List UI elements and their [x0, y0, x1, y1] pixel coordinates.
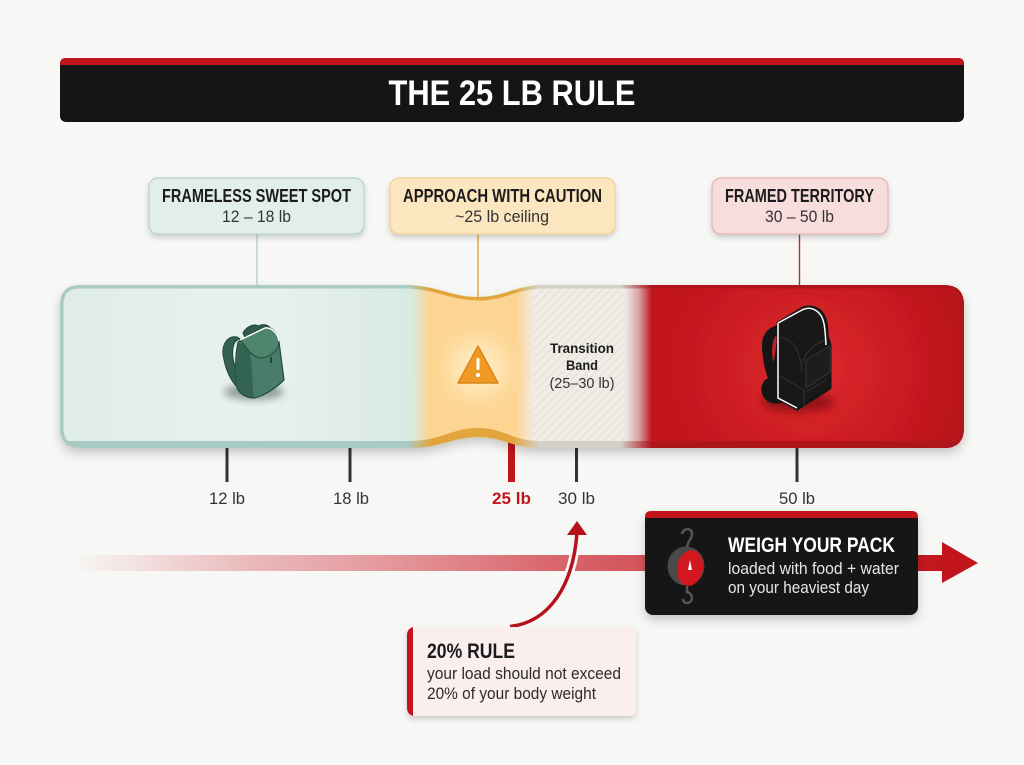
- red zone glow: [702, 288, 924, 441]
- tick: 18 lb: [348, 448, 352, 482]
- label: framed territory: FRAMED TERRITORY: [725, 186, 874, 206]
- card: weigh your pack: [645, 511, 918, 615]
- load progression arrow: [75, 542, 978, 583]
- title bar: THE 25 LB RULE: [388, 74, 636, 113]
- transition band hatch: [533, 285, 625, 448]
- label: approach with caution: ~25 lb ceiling: [455, 207, 549, 226]
- connector: caution: [477, 234, 479, 298]
- tick: 30 lb: [575, 448, 578, 482]
- tick: 50 lb: [796, 448, 798, 482]
- label: frameless sweet spot: 12 – 18 lb: [222, 207, 291, 226]
- icon: green frameless backpack: [223, 325, 284, 400]
- tick labels: 12 lb: [209, 489, 245, 508]
- title bar: [60, 58, 964, 122]
- connector: frameless: [256, 234, 258, 286]
- infographic: the 25 lb rule: [56, 58, 978, 722]
- transition band text: (25–30 lb): [550, 376, 614, 392]
- connector: framed: [798, 234, 800, 286]
- card: 20% rule: your load should not exceed: [427, 665, 621, 683]
- tick labels: 50 lb: [779, 489, 815, 508]
- transition band text: Transition: [550, 340, 614, 356]
- label: frameless sweet spot: [149, 178, 364, 234]
- card: weigh your pack: loaded with food + water: [728, 560, 899, 578]
- tick: 25 lb: [508, 441, 515, 482]
- card: 20% rule: [407, 627, 636, 716]
- amber glow: [442, 332, 514, 404]
- card: 20% rule: 20% of your body weight: [427, 685, 596, 703]
- icon: warning triangle: [458, 346, 498, 383]
- curved arrow: 20% rule to scale: [510, 521, 587, 626]
- icon: black framed backpack: [761, 307, 834, 412]
- weight band: [60, 285, 964, 448]
- tick labels: 25 lb: [492, 489, 531, 508]
- card: weigh your pack: WEIGH YOUR PACK: [728, 534, 895, 557]
- tick labels: 18 lb: [333, 489, 369, 508]
- band outline: [60, 285, 964, 448]
- label: framed territory: [712, 178, 888, 234]
- tick labels: [209, 489, 815, 508]
- label: approach with caution: APPROACH WITH CAUTION: [403, 186, 602, 206]
- icon: hanging scale: [668, 529, 706, 603]
- bottom rim: [60, 428, 964, 448]
- label: approach with caution: [390, 178, 615, 234]
- label: frameless sweet spot: FRAMELESS SWEET SPOT: [162, 186, 351, 206]
- tick labels: 30 lb: [558, 489, 595, 508]
- transition band text: Band: [566, 357, 598, 373]
- transition band text: [550, 340, 614, 392]
- label: framed territory: 30 – 50 lb: [765, 207, 834, 226]
- tick: 12 lb: [226, 448, 228, 482]
- card: weigh your pack: on your heaviest day: [728, 579, 870, 597]
- card: 20% rule: 20% RULE: [427, 640, 515, 663]
